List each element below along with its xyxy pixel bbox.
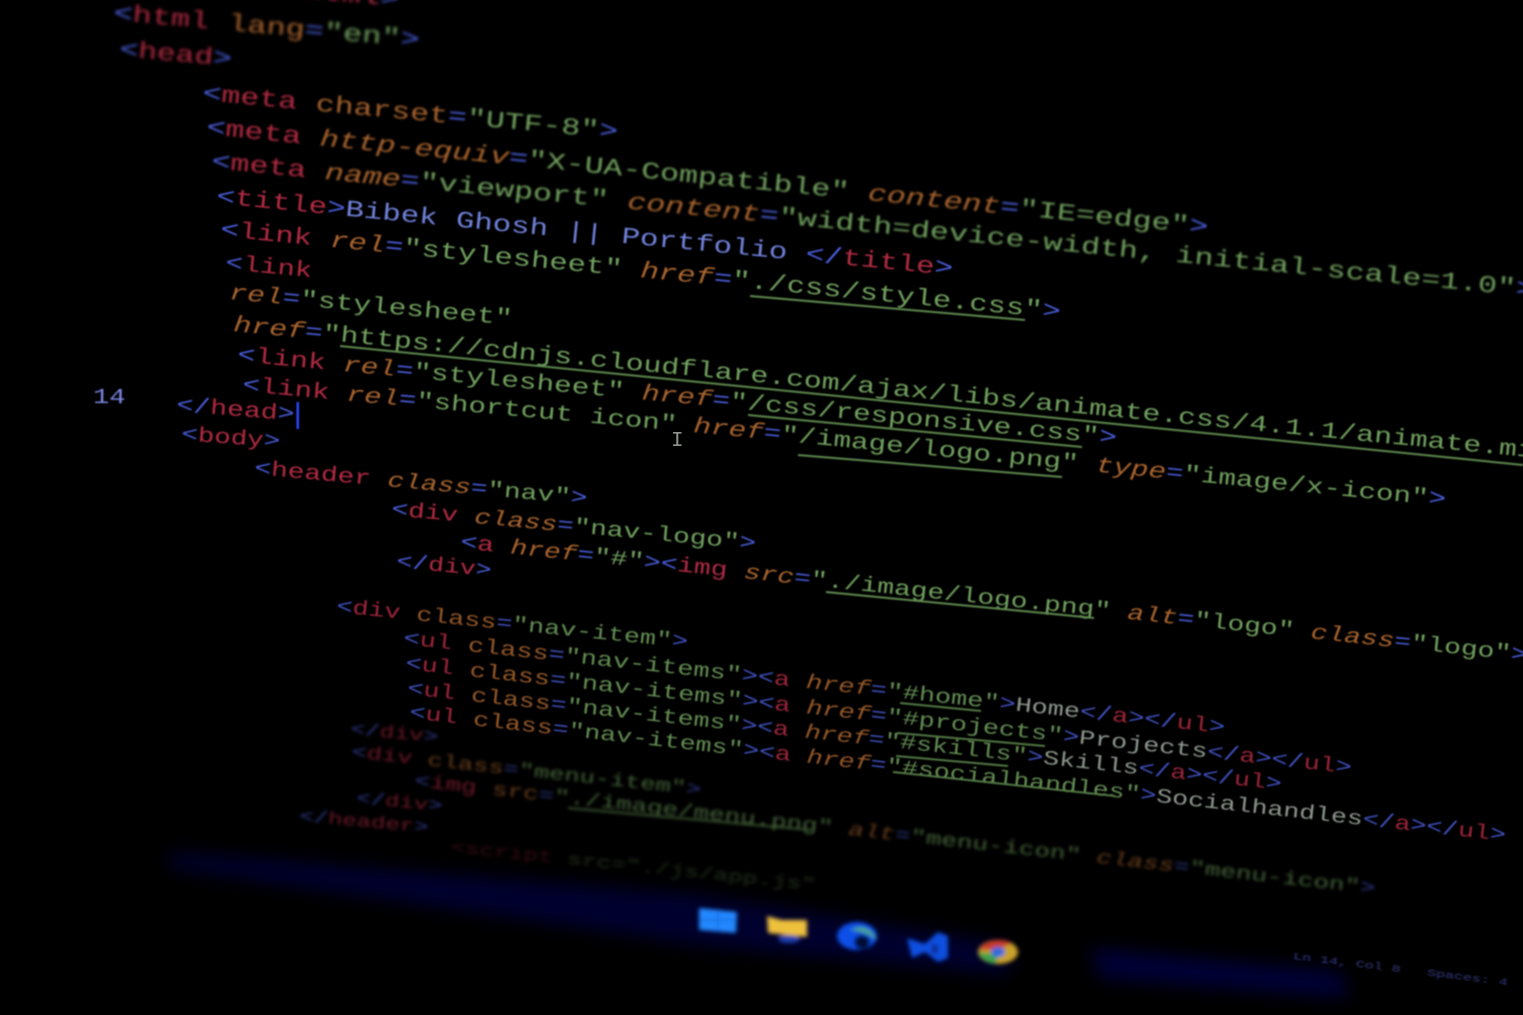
code line: link shortcut icon, second part: href="/image/logo.png" type="image/x-icon"> (692, 413, 1447, 513)
underline: logo.png (798, 455, 1062, 477)
underline: home (900, 703, 981, 711)
underline: animate.css url (340, 346, 1523, 465)
underline: projects (897, 733, 1045, 746)
code line: closing div: </div> (395, 551, 492, 583)
status bar text: Ln 14, Col 8 Spaces: 4 (1293, 950, 1509, 989)
icon: edge browser (837, 922, 877, 950)
code line: anchor and logo image: <a href="#"><img src="./image/logo.png" alt="logo" class="logo"> (459, 531, 1523, 668)
mouse I-beam cursor: I (671, 430, 684, 453)
code line: meta http-equiv: <meta http-equiv="X-UA-Compatible" content="IE=edge"> (205, 115, 1209, 242)
underline: style.css (750, 296, 1025, 320)
icon: windows start (699, 908, 737, 933)
code line: link style.css: <link rel="stylesheet" href="./css/style.css"> (219, 217, 1062, 326)
code line: nav item home: <ul class="nav-items"><a href="#home">Home</a></ul> (402, 628, 1226, 740)
code block: document head, top (111, 0, 421, 73)
code line: html: <html lang="en"> (112, 1, 421, 54)
code line: closing head: </head> (175, 393, 295, 427)
underline: socialhandles (893, 772, 1115, 796)
code block: title and links (93, 184, 1523, 668)
icon: file explorer folder (767, 916, 807, 943)
underline: responsive.css (748, 415, 1082, 447)
code line: rel: rel="stylesheet" (228, 280, 514, 332)
code line: meta viewport: <meta name="viewport" content="width=device-width, initial-scale=1.0"> (210, 149, 1523, 304)
code line: menu image: <img src="./image/menu.png" alt="menu-icon" class="menu-icon"> (413, 770, 1377, 900)
code block: navigation items (335, 596, 1507, 848)
code line: div nav-logo: <div class="nav-logo"> (390, 498, 757, 556)
code line: faint bottom line: <script src="./js/app.js" (449, 838, 817, 896)
code line: div menu-item: <div class="menu-item"> (350, 742, 702, 801)
code line: head: <head> (118, 37, 233, 73)
code line: closing div: </div> (349, 720, 439, 748)
underline: skills (896, 756, 1008, 766)
code line: link responsive.css: <link rel="stylesheet" href="/css/responsive.css"> (236, 342, 1118, 451)
code line: closing header: </header> (298, 808, 429, 838)
code line: link shortcut icon, first part: <link rel="shortcut icon" (241, 372, 678, 437)
underline: ./image/logo.png (826, 592, 1094, 618)
code line: nav item projects: <ul class="nav-items"><a href="#projects">Projects</a></ul> (404, 653, 1353, 780)
line number 14: 14 (93, 386, 126, 410)
code line: title: <title>Bibek Ghosh || Portfolio </title> (215, 184, 954, 283)
taskbar icons (699, 908, 1018, 964)
icon: vs code (907, 932, 948, 962)
icon: chrome browser (978, 940, 1018, 964)
code line: body: <body> (180, 424, 281, 454)
code block: meta tags (201, 81, 1523, 304)
code line: nav item skills: <ul class="nav-items"><a href="#skills">Skills</a></ul> (406, 678, 1283, 797)
code line: div nav-item: <div class="nav-item"> (335, 596, 689, 654)
code line: link: <link (224, 251, 313, 284)
code block: out-of-focus lower lines (298, 720, 1377, 900)
text cursor (296, 402, 299, 429)
code line: nav item socialhandles: <ul class="nav-items"><a href="#socialhandles">Socialhandles</a></ul> (408, 702, 1507, 848)
underline: menu.png (568, 808, 810, 830)
code line: closing div: </div> (355, 790, 443, 817)
code line: header: <header class="nav"> (253, 457, 588, 511)
code line: meta charset: <meta charset="UTF-8"> (201, 81, 619, 146)
taskbar glow (170, 852, 1350, 998)
